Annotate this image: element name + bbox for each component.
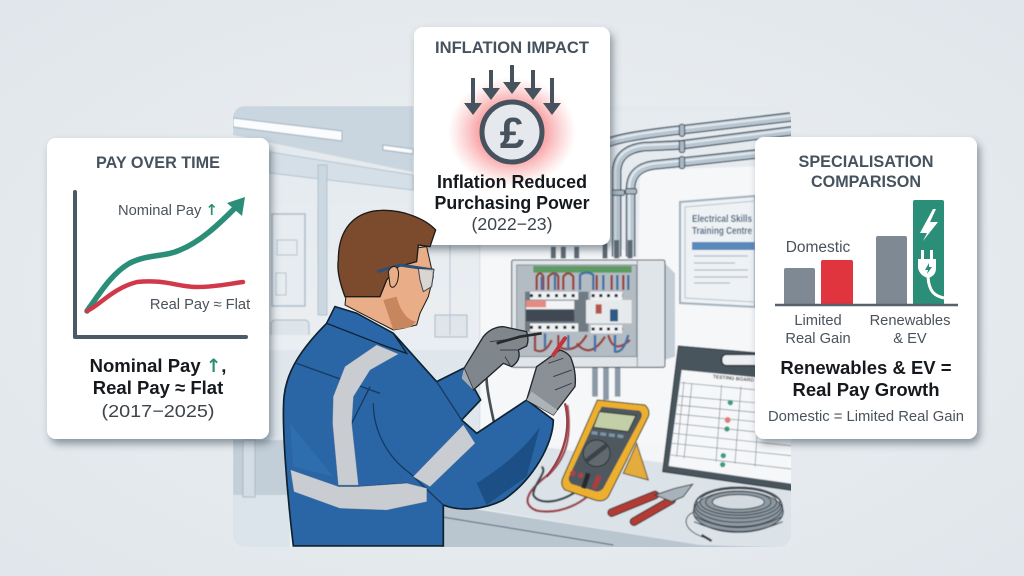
real pay line (87, 281, 243, 311)
illustration: electrician (283, 210, 575, 546)
workbench (440, 448, 791, 547)
test lead from left glove (486, 350, 495, 427)
card: inflation impact (414, 27, 610, 245)
jacket shading (477, 427, 540, 505)
icon: red glow (448, 77, 576, 187)
clipboard: testing board: TESTING BOARD (713, 374, 755, 384)
text: pay conclusion: Real Pay ≈ Flat (93, 377, 223, 398)
label: nominal pay: Nominal Pay ↑ (118, 201, 218, 219)
label: domestic: Domestic (786, 239, 851, 256)
bar: domestic grey (784, 268, 815, 304)
bar: renewables grey (876, 236, 907, 304)
icon: lightning bolt (920, 209, 938, 241)
arrowhead (227, 197, 245, 216)
text: pay conclusion: (2017−2025) (102, 401, 214, 421)
heading: inflation impact: INFLATION IMPACT (435, 39, 589, 57)
text: inflation conclusion: (2022−23) (472, 214, 552, 234)
text: pay conclusion: Nominal Pay ↑, (90, 355, 226, 377)
baseline (775, 304, 958, 306)
line chart (75, 192, 250, 337)
left glove (464, 327, 528, 390)
text: pay conclusion (90, 355, 226, 421)
right glove (527, 350, 575, 415)
poster: training centre: Training Centre (692, 226, 752, 237)
heading: pay over time: PAY OVER TIME (96, 154, 220, 172)
safety glasses (377, 265, 433, 272)
red test probe (553, 338, 565, 355)
label: real pay: Real Pay ≈ Flat (150, 297, 250, 313)
bar labels: & EV (893, 331, 927, 347)
clipboard: testing board (663, 346, 800, 492)
right wall and conduit pipes (480, 106, 793, 446)
reflective strips (291, 345, 475, 510)
text: specialisation conclusion: Renewables & EV = (780, 357, 952, 378)
multimeter with leads (528, 400, 649, 512)
illustration: workshop scene background (233, 106, 800, 553)
heading: specialisation comparison (798, 153, 934, 191)
text: inflation conclusion: Inflation Reduced (437, 171, 587, 192)
text: inflation conclusion: Purchasing Power (434, 192, 590, 213)
text: inflation conclusion (434, 171, 590, 234)
consumer unit: electrical panel (512, 240, 675, 400)
ear (388, 266, 399, 287)
bar labels: Real Gain (785, 331, 851, 347)
bar chart (775, 200, 958, 347)
bar labels: Limited (794, 313, 842, 329)
card: pay over time (47, 138, 269, 439)
icon: pound coin: £ (500, 109, 525, 158)
bar labels: Renewables (870, 313, 950, 329)
neck and face (345, 247, 433, 330)
poster: training centre: Electrical Skills (692, 214, 752, 225)
heading: specialisation comparison: SPECIALISATION (798, 153, 934, 171)
poster: training centre (680, 196, 755, 307)
text: specialisation conclusion (768, 357, 964, 425)
heading: specialisation comparison: COMPARISON (811, 173, 921, 191)
bar labels (785, 313, 950, 347)
text: specialisation conclusion: Real Pay Growth (792, 379, 940, 400)
pliers (612, 484, 693, 522)
jacket (283, 307, 553, 546)
icon: plug (918, 250, 936, 278)
left wall and ceiling (233, 106, 483, 547)
bar: EV green with icons (913, 200, 944, 304)
axes (75, 192, 246, 337)
bar: domestic red (821, 260, 853, 304)
text: specialisation conclusion: Domestic = Limited Real Gain (768, 409, 964, 425)
coiled cable (686, 487, 783, 541)
hair (338, 210, 436, 297)
nominal pay line (87, 209, 234, 311)
card: specialisation comparison (755, 137, 977, 439)
black test probe (497, 333, 542, 343)
icon: down arrows (464, 65, 561, 115)
icon: pound coin (482, 102, 542, 162)
